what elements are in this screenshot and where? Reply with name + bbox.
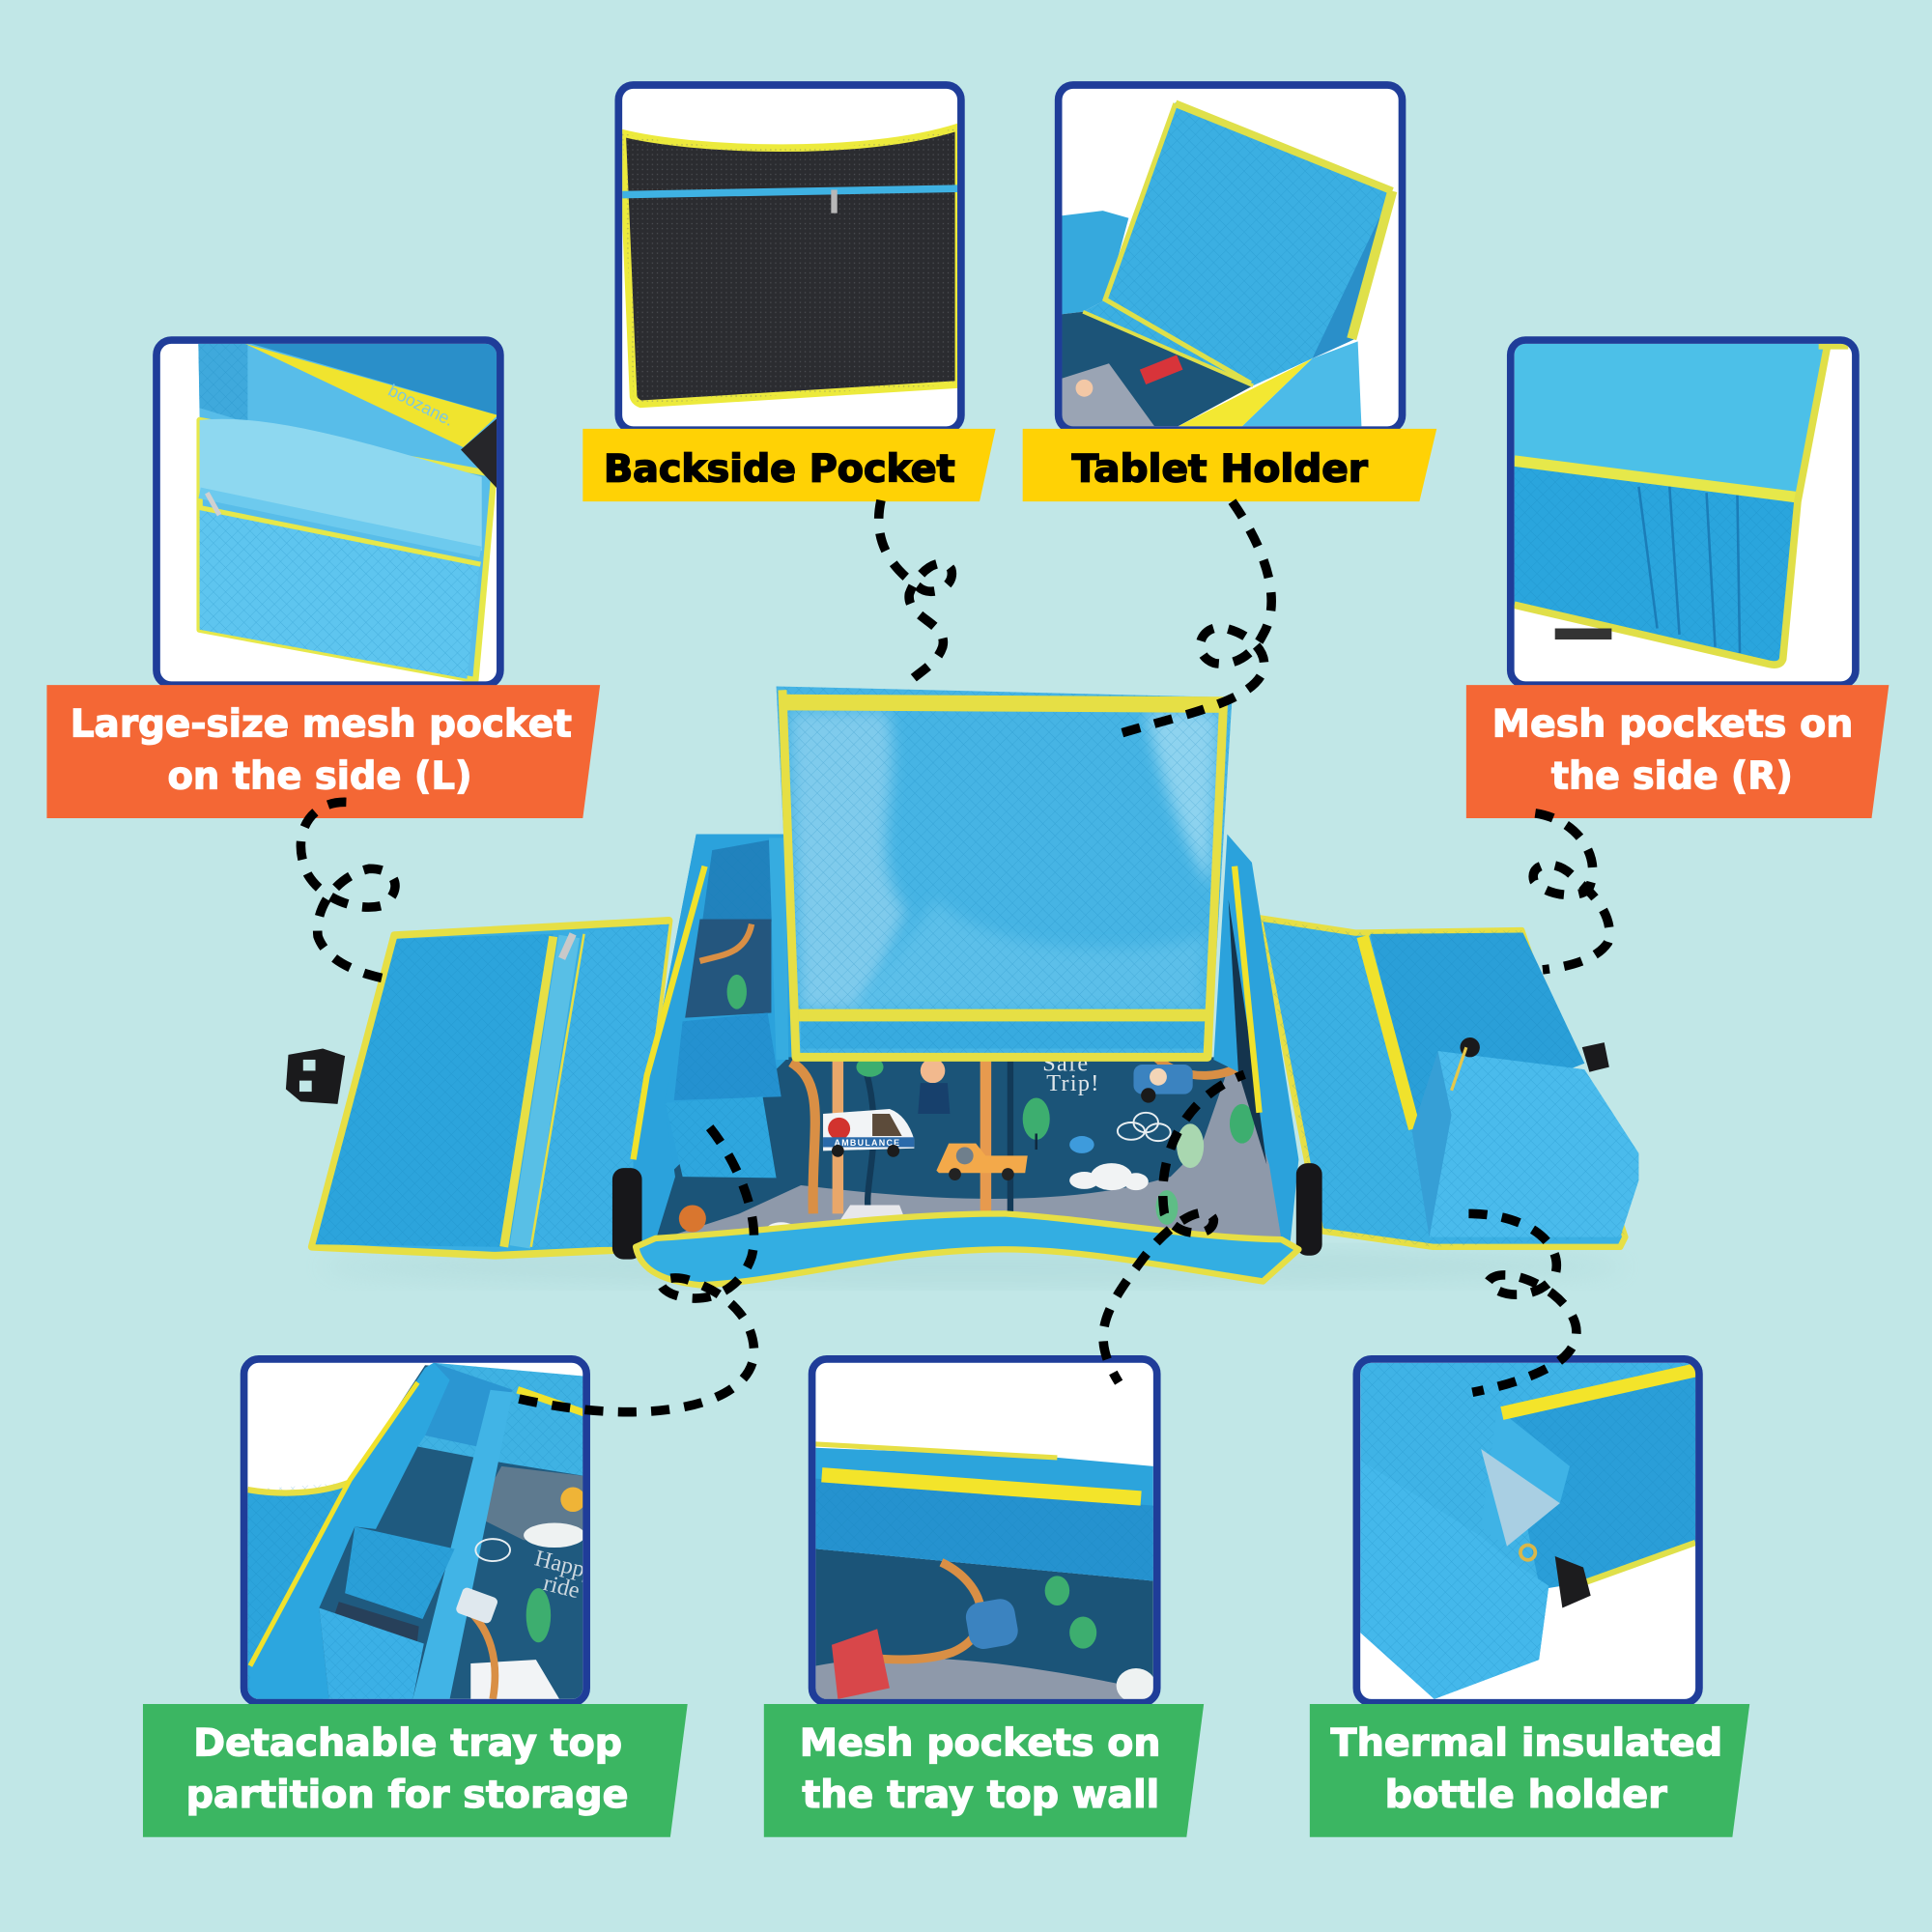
arrow: bottle holder [1468,1213,1577,1392]
ambulance [823,1109,914,1157]
panel: detachable partition photo: Happy [532,1546,600,1586]
panel: tablet holder photo [1059,85,1403,430]
arrow: right mesh pockets [1533,813,1609,970]
arrow: partition [518,1127,754,1412]
arrow: left mesh pocket [300,802,395,980]
arrow: tray top wall [1103,1074,1244,1382]
arrow: backside pocket [879,500,952,688]
label: detachable partition: Detachable tray top [193,1721,622,1766]
panel: backside pocket photo [618,85,961,430]
label: large-size mesh pocket [46,685,600,818]
label: tray top wall [764,1704,1204,1837]
panel: right mesh pockets photo [1511,340,1856,685]
arrow: tablet holder [1122,501,1271,733]
left compartment [634,835,788,1244]
ambulance: AMBULANCE [835,1138,900,1148]
label: mesh pockets right: the side (R) [1551,753,1793,798]
tree icons [856,1057,884,1077]
small van [838,1205,906,1224]
label: tablet holder: Tablet Holder [1072,447,1368,492]
label: bottle holder: Thermal insulated [1331,1721,1722,1766]
panel: detachable partition photo: ride [541,1570,582,1604]
label: tablet holder [1023,429,1436,501]
label: mesh pockets right: Mesh pockets on [1492,702,1853,747]
bottle holder [1412,1037,1638,1237]
right compartment [1213,835,1298,1244]
label: backside pocket: Backside Pocket [604,447,955,492]
panel: bottle holder photo [1356,1359,1699,1703]
left compartment base [634,835,795,1244]
label: bottle holder [1310,1704,1749,1837]
label: large-size mesh pocket: on the side (L) [167,753,472,798]
right wing [1260,918,1625,1247]
label: detachable partition [143,1704,688,1837]
clouds [1069,1163,1149,1190]
product: open travel tray [286,686,1638,1287]
pocket lower [666,1096,777,1178]
left wing [312,921,669,1256]
text: safe trip: Safe [1042,1050,1089,1076]
label: tray top wall: the tray top wall [802,1773,1159,1817]
panel: left mesh pocket photo [156,340,500,685]
tablet holder [777,686,1233,1060]
wheels [612,1163,1322,1260]
label: tray top wall: Mesh pockets on [800,1721,1161,1766]
police officer [921,1059,945,1083]
police car [1133,1065,1193,1103]
label: mesh pockets right [1466,685,1889,818]
right strap block [1582,1042,1609,1072]
lion [679,1205,706,1233]
panel: tray top wall pockets photo [812,1359,1157,1703]
tray floor illustration: Trip! [1046,1070,1100,1096]
left buckle [286,1048,345,1104]
tray floor illustration [656,1050,1282,1240]
label: large-size mesh pocket: Large-size mesh pocket [71,702,572,747]
pocket upper [674,1012,781,1100]
label: detachable partition: partition for storage [186,1773,629,1817]
tray front rim [636,1213,1298,1285]
panel: left mesh pocket photo: boozane. [385,381,457,430]
label: bottle holder: bottle holder [1385,1773,1667,1817]
label: backside pocket [582,429,996,501]
small cloud [766,1222,796,1237]
panel: detachable partition photo [244,1359,600,1703]
taxi [936,1144,1028,1180]
bird [1069,1136,1094,1153]
